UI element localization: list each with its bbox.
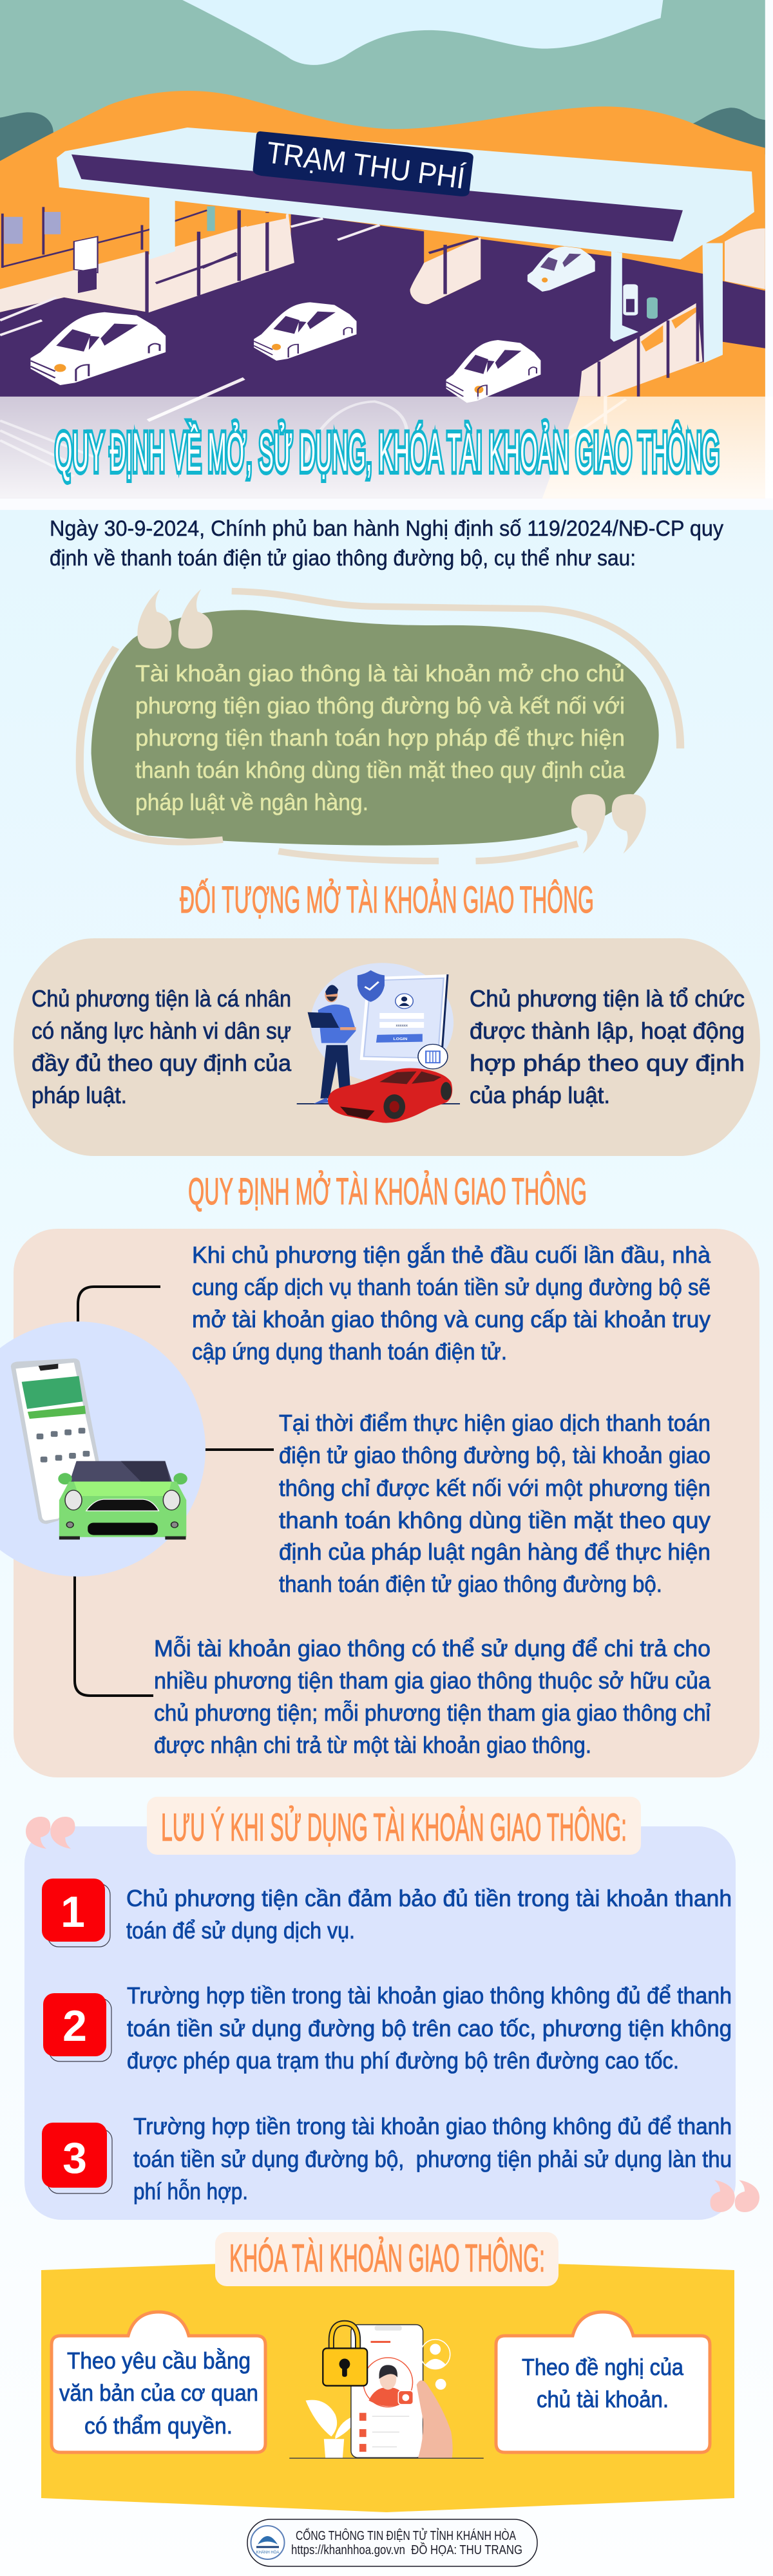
right toll booths xyxy=(579,302,703,397)
text block 2: thông chỉ được kết nối với một phương tiện xyxy=(279,1475,711,1501)
text block 3: nhiều phương tiện tham gia giao thông thuộc sở hữu của xyxy=(154,1667,711,1694)
intro text xyxy=(50,516,723,571)
text: organisation owner: hợp pháp theo quy định xyxy=(470,1050,745,1076)
car 1 xyxy=(30,312,166,385)
card: owner request: Theo đề nghị của xyxy=(522,2354,684,2380)
connector lines xyxy=(75,1287,274,1696)
note 3: Trường hợp tiền trong tài khoản giao thông không đủ để thanh xyxy=(133,2113,732,2139)
quote text: pháp luật về ngân hàng. xyxy=(135,789,368,815)
quote text: phương tiện giao thông đường bộ và kết nối với xyxy=(135,692,625,719)
title band overlay xyxy=(0,397,773,498)
footer credit xyxy=(247,2519,537,2566)
dark hills xyxy=(0,108,765,164)
pavement strip xyxy=(0,251,148,312)
text block 3: Mỗi tài khoản giao thông có thể sử dụng để chi trả cho xyxy=(154,1635,711,1662)
text block 2: thanh toán không dùng tiền mặt theo quy xyxy=(279,1507,711,1533)
text block 1: Khi chủ phương tiện gắn thẻ đầu cuối lần đầu, nhà xyxy=(192,1242,711,1268)
opening quote marks xyxy=(26,1817,75,1849)
quote blob and frame xyxy=(80,589,680,861)
text: organisation owner xyxy=(470,985,745,1108)
logo: KHÁNH HÒA xyxy=(256,2550,279,2555)
text block 3: được nhận chi trả từ một tài khoản giao thông. xyxy=(154,1732,591,1758)
car 4 xyxy=(528,247,595,292)
text block 1: cung cấp dịch vụ thanh toán tiền sử dụng đường bộ sẽ xyxy=(192,1274,711,1300)
car 3 xyxy=(446,340,540,402)
text block 1 xyxy=(192,1242,711,1365)
note 2 xyxy=(127,1982,732,2074)
note 2: toán tiền sử dụng đường bộ trên cao tốc, phương tiện không xyxy=(127,2015,732,2041)
middle island xyxy=(410,230,481,304)
panel: account holders xyxy=(14,938,760,1156)
text block 2 xyxy=(279,1410,711,1597)
note 1: Chủ phương tiện cần đảm bảo đủ tiền trong tài khoản thanh xyxy=(126,1885,732,1911)
intro text: định về thanh toán điện tử giao thông đường bộ, cụ thể như sau: xyxy=(50,546,636,571)
columns xyxy=(149,197,175,260)
text block 3 xyxy=(154,1635,711,1758)
canopy underside xyxy=(72,155,683,242)
badge 2 xyxy=(43,1993,111,2061)
text: individual owner: Chủ phương tiện là cá nhân xyxy=(32,985,291,1012)
badge 3: 3 xyxy=(62,2134,87,2183)
badge 1: 1 xyxy=(61,1888,85,1937)
text: organisation owner: được thành lập, hoạt động xyxy=(470,1018,745,1044)
quote text: phương tiện thanh toán hợp pháp để thực hiện xyxy=(135,724,625,751)
note 3: toán tiền sử dụng đường bộ, phương tiện phải sử dụng làn thu xyxy=(133,2146,732,2172)
note 1: toán để sử dụng dịch vụ. xyxy=(126,1917,355,1944)
note 3 xyxy=(133,2113,732,2204)
text: individual owner xyxy=(32,985,292,1108)
card: owner request xyxy=(496,2312,710,2452)
text block 2: định của pháp luật ngân hàng để thực hiện xyxy=(279,1539,711,1565)
text block 2: thanh toán điện tử giao thông đường bộ. xyxy=(279,1571,662,1597)
badge 3 xyxy=(42,2123,112,2193)
mountains xyxy=(0,0,765,230)
heading pill xyxy=(215,2232,558,2286)
note 2: được phép qua trạm thu phí đường bộ trên đường cao tốc. xyxy=(127,2047,679,2074)
card: authority request xyxy=(52,2312,265,2452)
text: organisation owner: Chủ phương tiện là tổ chức xyxy=(470,985,745,1012)
road surface xyxy=(0,214,765,498)
heading pill xyxy=(147,1797,641,1855)
panel: usage notes xyxy=(24,1797,759,2220)
quote text xyxy=(135,660,625,815)
quote panel xyxy=(80,589,680,861)
illustration: login and red car: xxxxxx xyxy=(396,1024,408,1028)
text: individual owner: có năng lực hành vi dân sự xyxy=(32,1018,291,1044)
quote text: Tài khoản giao thông là tài khoản mở cho chủ xyxy=(135,660,625,687)
left toll booths xyxy=(148,214,294,313)
badge 2: 2 xyxy=(62,2002,87,2050)
text block 2: điện tử giao thông đường bộ, tài khoản giao xyxy=(279,1442,711,1468)
note 3: phí hỗn hợp. xyxy=(133,2178,248,2204)
text: organisation owner: của pháp luật. xyxy=(470,1082,610,1108)
logo xyxy=(251,2526,285,2559)
text block 1: mở tài khoản giao thông và cung cấp tài khoản truy xyxy=(192,1306,711,1332)
text: individual owner: pháp luật. xyxy=(32,1082,127,1108)
illustration: phone app and green car xyxy=(11,1358,187,1540)
card: authority request: Theo yêu cầu bằng xyxy=(67,2347,251,2374)
text: individual owner: đầy đủ theo quy định của xyxy=(32,1050,292,1076)
car 2 xyxy=(254,302,356,361)
illustration: lock and phone xyxy=(289,2323,484,2458)
illustration: login and red car xyxy=(297,963,460,1123)
credit text xyxy=(291,2528,522,2557)
blue circle xyxy=(0,1321,205,1577)
hero illustration: toll station xyxy=(0,0,773,510)
text block 3: chủ phương tiện; mỗi phương tiện tham gia giao thông chỉ xyxy=(154,1700,711,1726)
fence posts and signs xyxy=(3,207,207,268)
card: owner request: chủ tài khoản. xyxy=(537,2386,669,2412)
sign text: TRẠM THU PHÍ xyxy=(265,135,467,195)
panel: account lock xyxy=(41,2232,734,2512)
panel: account opening rules xyxy=(0,1229,759,1777)
text block 1: cập ứng dụng thanh toán điện tử. xyxy=(192,1338,507,1365)
text block 2: Tại thời điểm thực hiện giao dịch thanh toán xyxy=(279,1410,711,1436)
note 2: Trường hợp tiền trong tài khoản giao thông không đủ để thanh xyxy=(127,1982,732,2009)
sign plate xyxy=(253,131,473,196)
card: authority request: có thẩm quyền. xyxy=(84,2412,233,2439)
credit text: https://khanhhoa.gov.vn ĐỒ HỌA: THU TRANG xyxy=(291,2542,522,2557)
canopy xyxy=(57,128,754,260)
intro text: Ngày 30-9-2024, Chính phủ ban hành Nghị định số 119/2024/NĐ-CP quy xyxy=(50,516,723,541)
note 1 xyxy=(126,1885,732,1944)
road dash xyxy=(148,379,244,421)
closing quote marks xyxy=(710,2180,759,2212)
illustration: login and red car: LOGIN xyxy=(394,1037,408,1041)
orange hillside xyxy=(0,91,765,498)
ghost reflection xyxy=(0,396,626,477)
quote text: thanh toán không dùng tiền mặt theo quy định của xyxy=(135,757,625,783)
right side pavement xyxy=(579,230,765,498)
badge 1 xyxy=(42,1879,110,1947)
card: authority request: văn bản của cơ quan xyxy=(59,2380,258,2406)
credit text: CỔNG THÔNG TIN ĐIỆN TỬ TỈNH KHÁNH HÒA xyxy=(296,2528,517,2543)
